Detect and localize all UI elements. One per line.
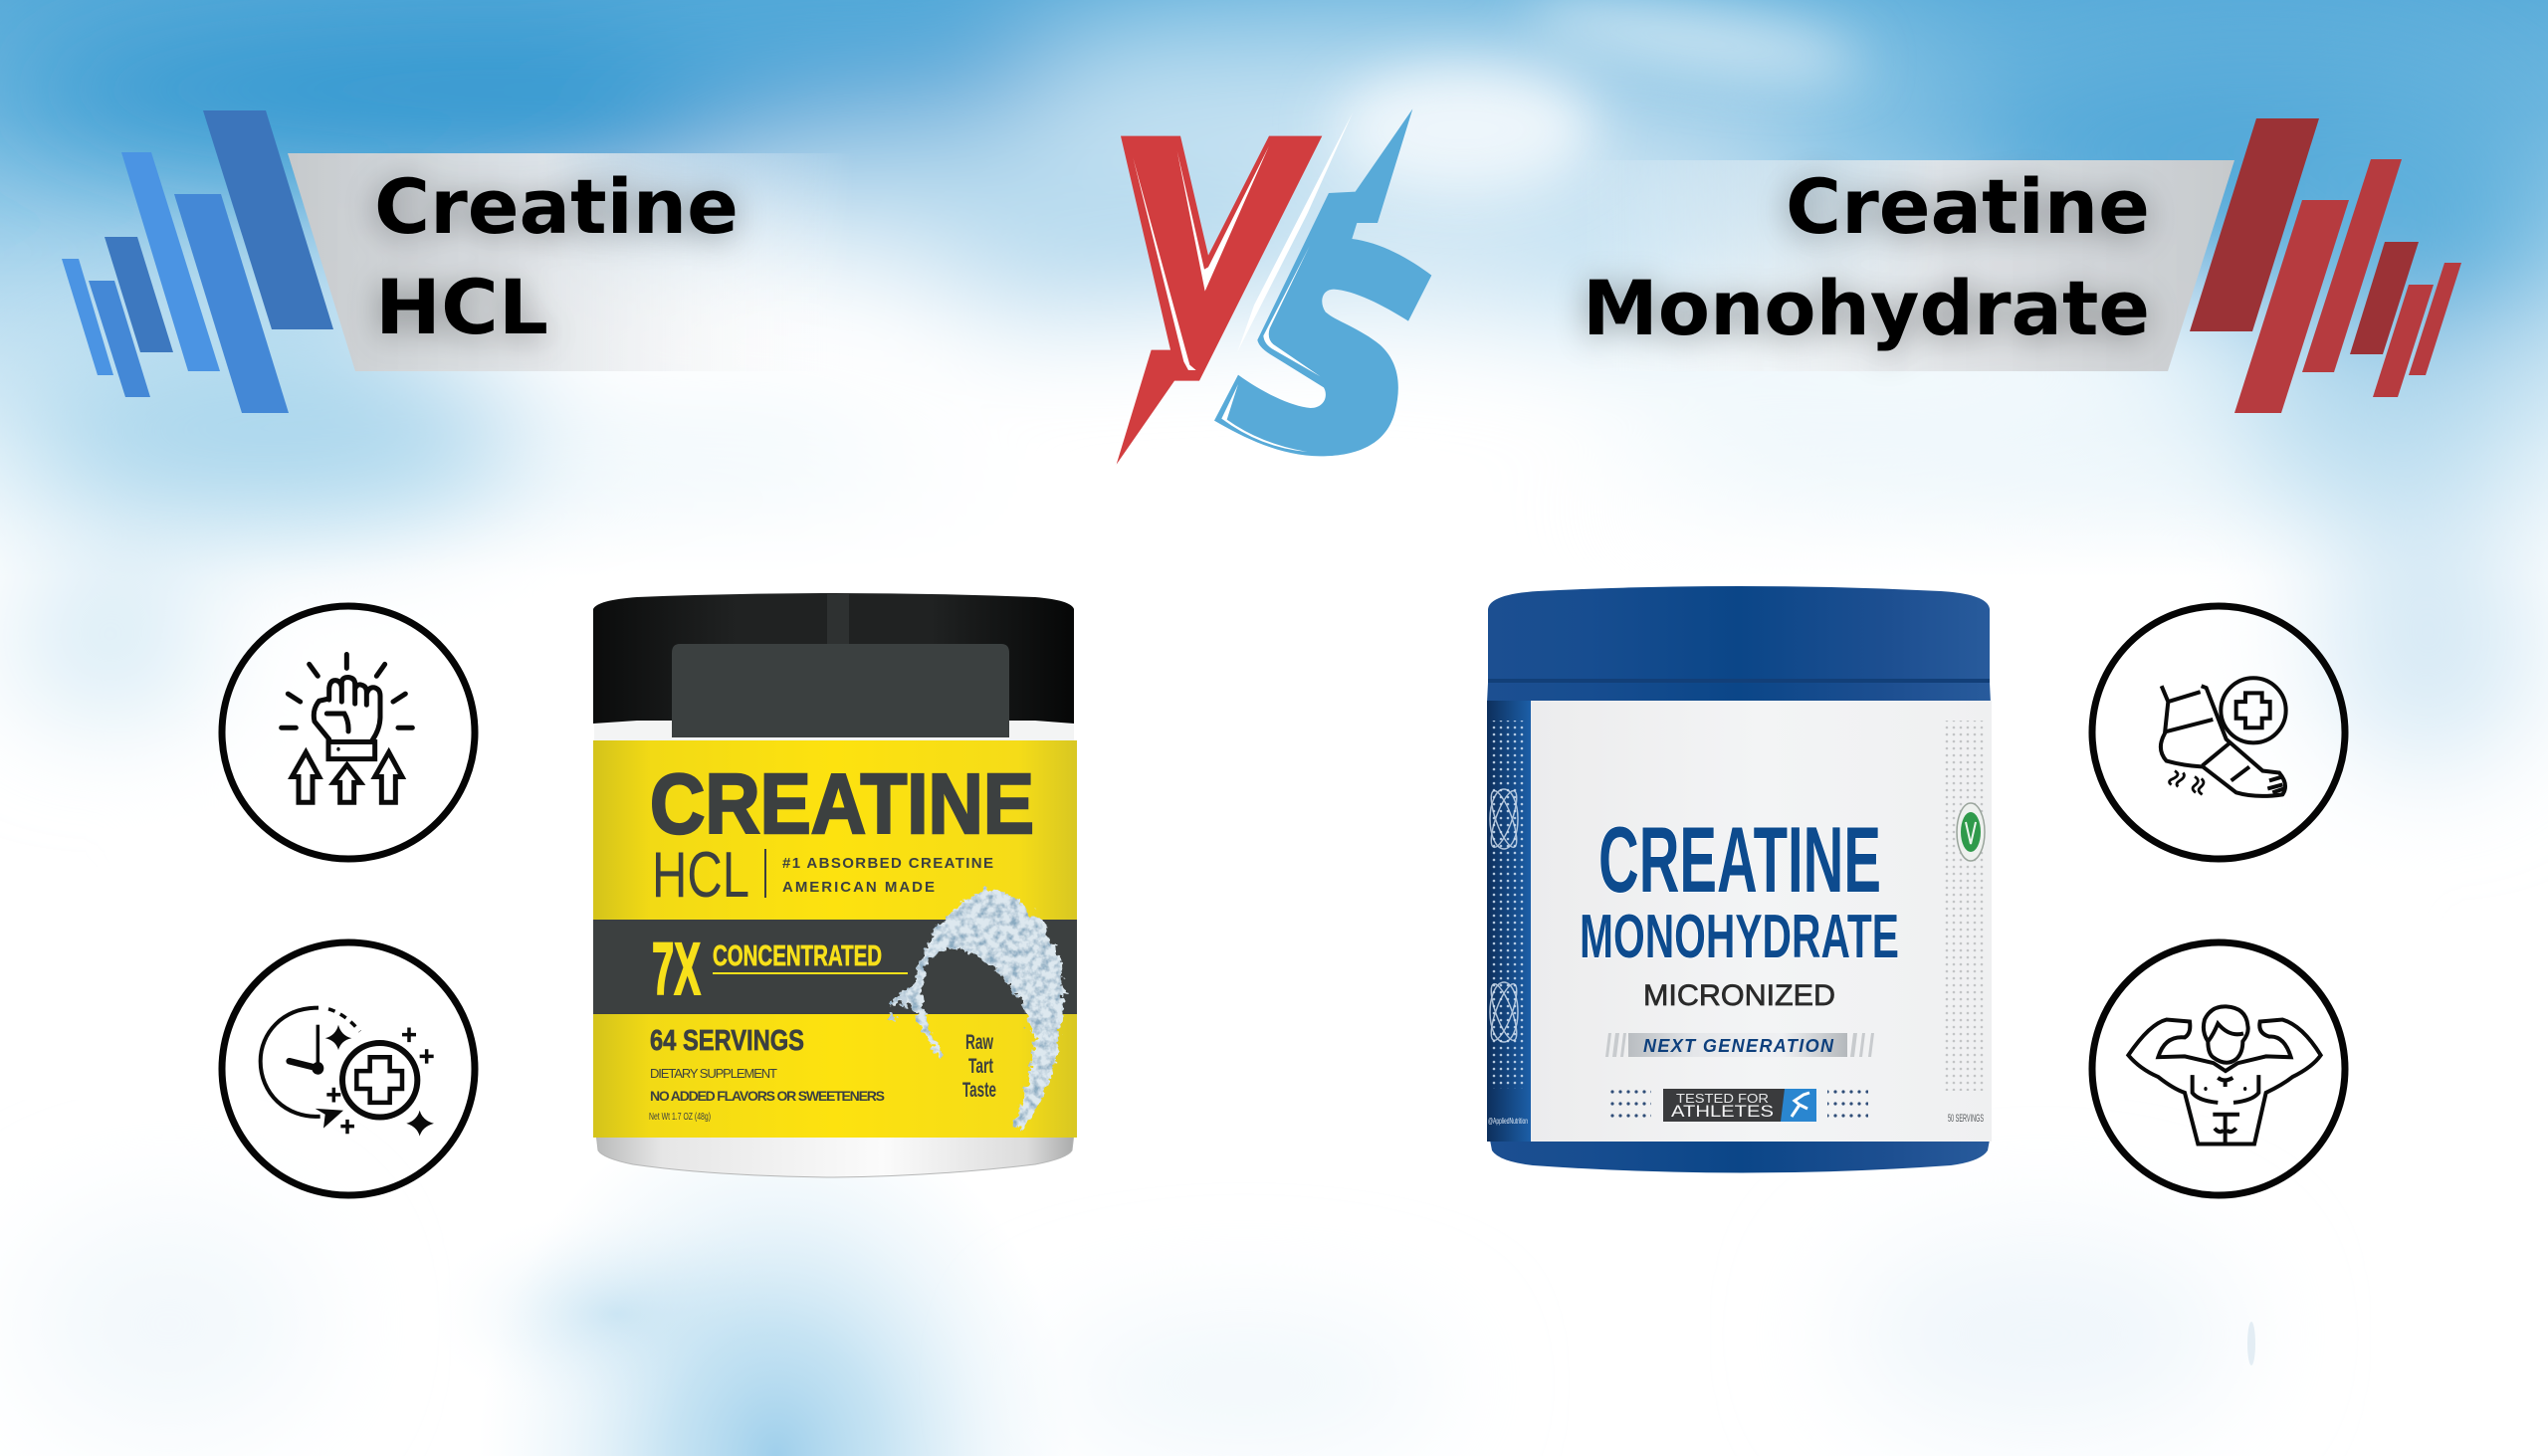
tested for athletes badge <box>1663 1089 1816 1122</box>
water splash <box>889 888 1064 1131</box>
heading: Creatine HCL: Creatine <box>374 162 739 251</box>
label text: 64 servings: DIETARY SUPPLEMENT <box>650 1066 777 1081</box>
jar base <box>1489 1135 1991 1172</box>
banner panel right <box>1573 160 2234 371</box>
label blue side panel: @AppliedNutrition <box>1488 1117 1528 1126</box>
heading: Creatine Monohydrate <box>1583 162 2150 352</box>
tested for athletes badge: TESTED FOR <box>1676 1091 1769 1106</box>
label blue side panel <box>1486 701 1531 1142</box>
heading: Creatine Monohydrate: Creatine <box>1786 162 2150 251</box>
banner panel left <box>288 153 856 371</box>
icon: bandaged foot <box>2092 606 2345 859</box>
label text: HCL: HCL <box>652 838 749 911</box>
jar base <box>595 1125 1075 1177</box>
product: Creatine HCL jar <box>593 593 1077 1177</box>
right dot panel <box>1945 721 1985 1091</box>
header: Creatine HCL <box>62 110 856 413</box>
label text: 64 servings: 64 SERVINGS <box>650 1025 804 1057</box>
letter S <box>1214 108 1431 456</box>
label text: raw tart taste: Taste <box>962 1079 996 1102</box>
label text: raw tart taste: Raw <box>965 1031 993 1054</box>
dark band <box>593 920 1077 1014</box>
tested for athletes badge: ATHLETES <box>1671 1102 1774 1121</box>
label text: MICRONIZED: MICRONIZED <box>1643 979 1835 1012</box>
next generation chip <box>1605 1033 1874 1057</box>
product: Creatine Monohydrate jar <box>1486 586 1992 1172</box>
label <box>593 740 1077 1138</box>
servings note: 50 SERVINGS <box>1948 1113 1984 1125</box>
letter V <box>1117 136 1322 465</box>
VS emblem <box>1117 108 1431 465</box>
label text: 64 servings: Net Wt 1.7 OZ (48g) <box>649 1112 711 1123</box>
lid rim <box>1488 679 1990 683</box>
bars icon: blue <box>62 110 333 413</box>
label text: raw tart taste: Tart <box>968 1055 993 1078</box>
jar lid <box>593 593 1074 724</box>
slash <box>1237 112 1353 351</box>
icon: flexing muscular torso <box>2092 942 2345 1195</box>
heading: Creatine Monohydrate: Monohydrate <box>1583 264 2150 352</box>
label text: raw tart taste <box>962 1031 996 1102</box>
jar lid <box>1488 586 1990 679</box>
label text: 64 servings <box>649 1025 885 1123</box>
label text: 64 servings: NO ADDED FLAVORS OR SWEETENERS <box>650 1088 885 1104</box>
lid patch <box>672 644 1009 737</box>
label text: claims: AMERICAN MADE <box>782 879 935 896</box>
label text: 7X concentrated: 7X <box>652 928 701 1010</box>
label text: claims <box>782 855 993 896</box>
dot rows <box>1610 1089 1868 1120</box>
label text: 7X concentrated <box>652 928 908 1010</box>
icon: clock and medical cross (recovery) <box>222 942 475 1195</box>
divider <box>764 849 766 898</box>
next generation chip: NEXT GENERATION <box>1643 1036 1834 1056</box>
label text: CREATINE: CREATINE <box>650 757 1034 852</box>
bars icon: red <box>2190 118 2461 413</box>
heading: Creatine HCL <box>374 162 739 351</box>
label text: 7X concentrated: CONCENTRATED <box>713 940 882 972</box>
label white panel <box>1531 701 1992 1142</box>
label text: CREATINE: CREATINE <box>1598 807 1881 912</box>
icon: fist with arrows (strength) <box>222 606 475 859</box>
vegan badge <box>1957 803 1985 861</box>
heading: Creatine HCL: HCL <box>375 263 548 351</box>
jar neck <box>594 717 1074 746</box>
label text: claims: #1 ABSORBED CREATINE <box>782 855 993 872</box>
label text: MONOHYDRATE: MONOHYDRATE <box>1580 903 1899 971</box>
header: Creatine Monohydrate <box>1573 118 2461 413</box>
